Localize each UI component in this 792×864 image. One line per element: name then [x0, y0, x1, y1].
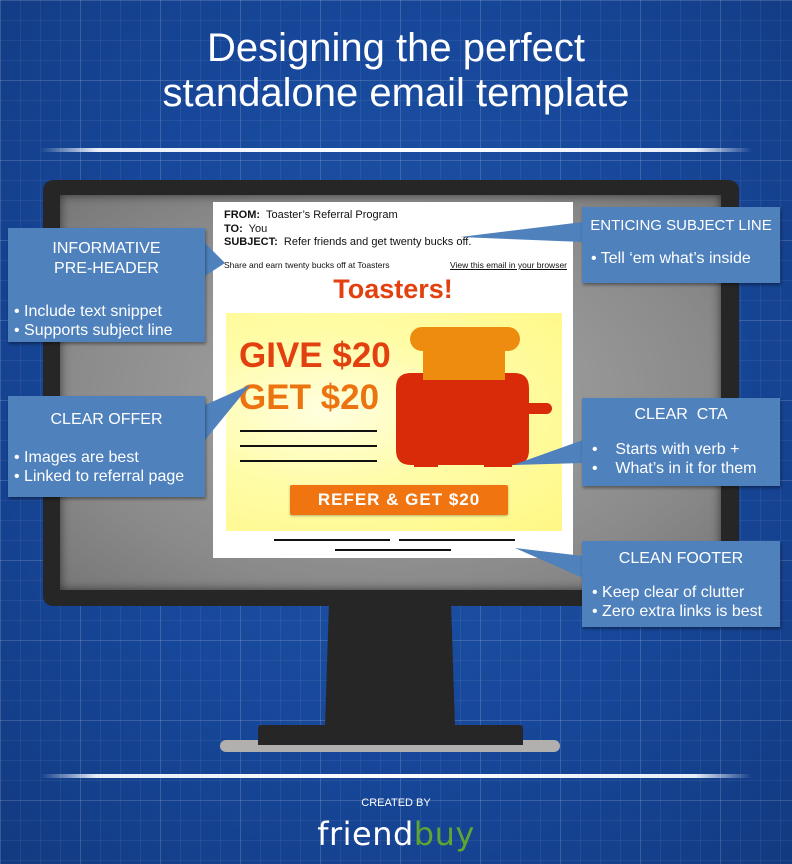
callout: clear offer: • Images are best [14, 449, 139, 466]
callout: clean footer: CLEAN FOOTER [619, 550, 743, 567]
callout: informative pre-header: INFORMATIVE [52, 240, 161, 257]
email header: SUBJECT: Refer friends and get twenty bucks off. [224, 236, 471, 248]
callout: clear cta: • What’s in it for them [592, 460, 756, 477]
callout: enticing subject line: ENTICING SUBJECT LINE [590, 217, 772, 234]
callout: clear cta [582, 398, 780, 486]
callout: informative pre-header: • Supports subject line [14, 322, 173, 339]
email header [224, 209, 471, 248]
callout: clean footer: • Keep clear of clutter [592, 584, 744, 601]
monitor [43, 180, 739, 606]
offer banner [226, 313, 562, 531]
pre-header: Share and earn twenty bucks off at Toasters [224, 260, 390, 270]
title: Designing the perfect [207, 26, 585, 70]
offer banner: GET $20 [239, 378, 379, 417]
cta button [290, 485, 508, 515]
brand: Toasters! [333, 274, 453, 304]
cta button: REFER & GET $20 [318, 490, 480, 509]
callout: enticing subject line [582, 207, 780, 283]
email card [213, 202, 573, 558]
offer banner: GIVE $20 [239, 336, 391, 375]
title [163, 26, 629, 115]
callout: clear cta: • Starts with verb + [592, 441, 739, 458]
callout: informative pre-header: • Include text snippet [14, 303, 162, 320]
callout: clear offer [8, 396, 205, 497]
email header: TO: You [224, 222, 267, 234]
email header: FROM: Toaster’s Referral Program [224, 209, 398, 221]
screen [60, 195, 721, 590]
callout: enticing subject line: • Tell ‘em what’s inside [591, 250, 751, 267]
callout: clear offer: • Linked to referral page [14, 468, 184, 485]
callout: clear cta: CLEAR CTA [634, 406, 728, 423]
callout: clean footer: • Zero extra links is best [592, 603, 762, 620]
callout: clear offer: CLEAR OFFER [50, 411, 162, 428]
callout: clean footer [582, 541, 780, 627]
callout: informative pre-header [8, 228, 205, 342]
logo: friendbuy: friendbuy [317, 815, 475, 853]
pre-header: View this email in your browser [450, 260, 567, 270]
icon: toaster [396, 327, 552, 467]
title: standalone email template [163, 71, 629, 115]
credit: CREATED BY [361, 797, 431, 809]
monitor stand [220, 606, 560, 752]
pre-header [224, 260, 567, 270]
callout: informative pre-header: PRE-HEADER [54, 260, 159, 277]
